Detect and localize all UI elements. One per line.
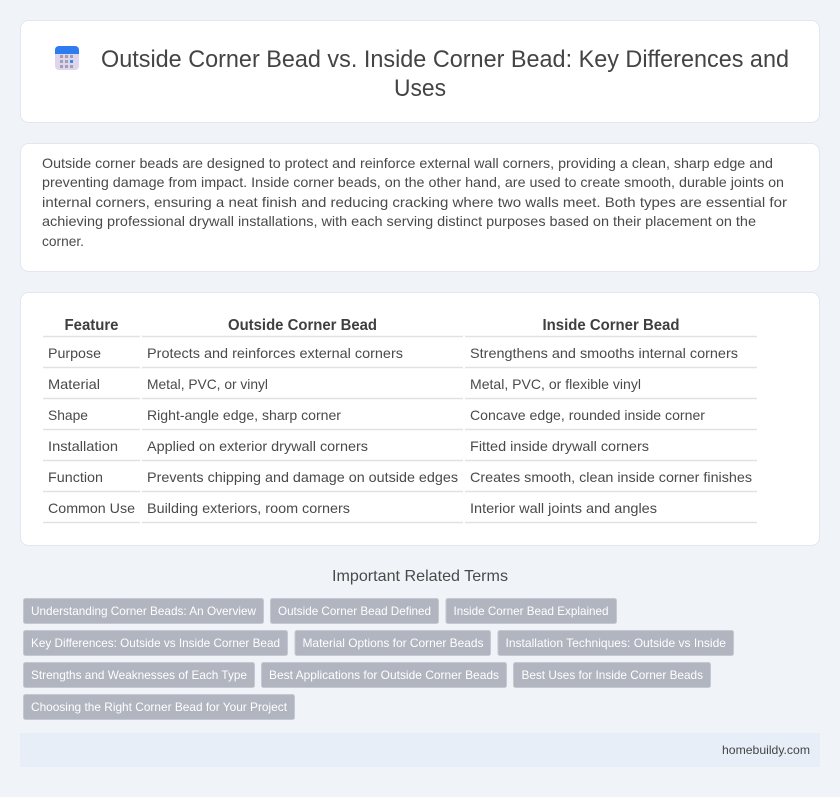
row: installation: Fitted inside drywall corners	[470, 438, 649, 454]
title	[101, 46, 789, 102]
row: function: Function	[48, 469, 103, 485]
tag	[24, 630, 288, 656]
heading: related terms: Important Related Terms	[332, 568, 508, 585]
tag	[24, 598, 264, 624]
related term tags	[24, 598, 734, 720]
tag: Understanding Corner Beads: An Overview	[31, 604, 256, 618]
row: material: Metal, PVC, or flexible vinyl	[470, 376, 641, 392]
table header	[64, 317, 680, 334]
title: Uses	[394, 75, 446, 102]
footer	[20, 733, 820, 767]
panel: summary text: achieving professional drywall installations, with each serving distinct purposes based on their placement on the	[42, 213, 756, 229]
row: shape: Concave edge, rounded inside corner	[470, 407, 705, 423]
tag: Inside Corner Bead Explained	[454, 604, 608, 618]
tag: Key Differences: Outside vs Inside Corner Bead	[31, 636, 280, 650]
row: installation	[48, 438, 649, 454]
panel: comparison table	[20, 292, 820, 546]
tag: Installation Techniques: Outside vs Inside	[506, 636, 726, 650]
row: shape: Shape	[48, 407, 88, 423]
table header: Outside Corner Bead	[228, 317, 377, 334]
panel: summary text: preventing damage from impact. Inside corner beads, on the other hand, are used to create smooth, durable joints on	[42, 174, 784, 190]
row: function: Prevents chipping and damage on outside edges	[147, 469, 458, 485]
tag	[24, 662, 254, 688]
row: shape: Right-angle edge, sharp corner	[147, 407, 341, 423]
panel: summary text: internal corners, ensuring a neat finish and reducing cracking where two walls meet. Both types are essential for	[42, 194, 787, 210]
row: purpose	[48, 345, 738, 361]
row: common use	[48, 500, 657, 516]
row: shape	[48, 407, 705, 423]
table header: Feature	[64, 317, 119, 334]
tag	[514, 662, 710, 688]
row: common use: Common Use	[48, 500, 135, 516]
panel: title header	[20, 20, 820, 122]
tag	[270, 598, 438, 624]
row: function	[48, 469, 752, 485]
row: common use: Interior wall joints and angles	[470, 500, 657, 516]
row: installation: Applied on exterior drywall corners	[147, 438, 368, 454]
tag: Best Applications for Outside Corner Beads	[269, 668, 499, 682]
row: material	[48, 376, 641, 392]
row: installation: Installation	[48, 438, 118, 454]
panel: summary text: corner.	[42, 233, 84, 249]
tag: Material Options for Corner Beads	[302, 636, 484, 650]
row: function: Creates smooth, clean inside corner finishes	[470, 469, 752, 485]
panel: summary text: Outside corner beads are designed to protect and reinforce external wall corners, providing a clean, sharp edge and	[42, 155, 773, 171]
footer: homebuildy.com	[722, 743, 810, 757]
tag	[262, 662, 506, 688]
row: material: Material	[48, 376, 100, 392]
row: purpose: Strengthens and smooths internal corners	[470, 345, 738, 361]
row: material: Metal, PVC, or vinyl	[147, 376, 268, 392]
table header: Inside Corner Bead	[542, 317, 680, 334]
panel: summary text	[20, 144, 820, 272]
row: purpose: Purpose	[48, 345, 101, 361]
icon: calendar	[55, 46, 79, 70]
tag	[24, 694, 294, 720]
row: common use: Building exteriors, room corners	[147, 500, 350, 516]
tag	[498, 630, 734, 656]
row: purpose: Protects and reinforces external corners	[147, 345, 403, 361]
tag: Strengths and Weaknesses of Each Type	[31, 668, 247, 682]
tag	[446, 598, 616, 624]
tag	[295, 630, 490, 656]
tag: Choosing the Right Corner Bead for Your Project	[31, 700, 288, 714]
tag: Outside Corner Bead Defined	[278, 604, 431, 618]
title: Outside Corner Bead vs. Inside Corner Bead: Key Differences and	[101, 46, 789, 73]
tag: Best Uses for Inside Corner Beads	[522, 668, 703, 682]
